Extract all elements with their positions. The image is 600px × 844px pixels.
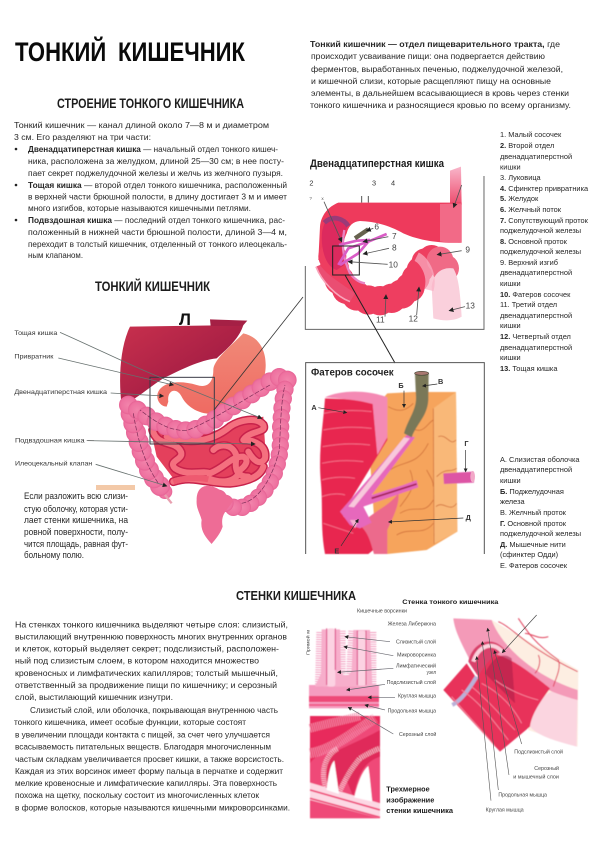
3D wall view: [310, 716, 380, 818]
labels right: Круглая мышца: [486, 807, 524, 813]
markers: 3: [372, 178, 376, 187]
legend: duodenum: 6. Желчный поток: [500, 205, 562, 214]
chart: digestive organs: [14, 319, 297, 544]
markers: 4: [391, 178, 395, 187]
text block: walls description: Слизистый слой, или оболочка, покрывающая внутреннюю часть: [30, 705, 278, 715]
text block: walls description: тонкого кишечника, имеет особые функции, которые состоят: [14, 717, 246, 727]
text block: intro: происходит усваивание пищи: она подвергается действию: [311, 51, 546, 61]
heading: walls: СТЕНКИ КИШЕЧНИКА: [236, 589, 356, 603]
text block: walls description: слой, выстилающий кишечник изнутри.: [15, 692, 173, 702]
organ: rectum: [197, 486, 233, 544]
legend: papilla of Vater: Е. Фатеров сосочек: [500, 561, 568, 570]
text block: structure description: положенный в нижней части брюшной полости, длиной 3—4 м,: [28, 227, 287, 237]
text block: structure description: Тощая кишка — второй отдел тонкого кишечника, расположенный: [28, 180, 287, 190]
organ: stomach outlet: [450, 167, 462, 205]
labels left: Продольная мышца: [388, 708, 436, 714]
text block: structure description: 3 см. Его разделяют на три части:: [14, 132, 151, 142]
markers: ?: [309, 196, 312, 201]
labels: Привратник: [14, 353, 53, 360]
callout numbers: 11: [376, 314, 385, 324]
text block: structure description: [14, 120, 287, 260]
legend: duodenum: поджелудочной железы: [500, 247, 581, 256]
callout: 3D label: [386, 786, 453, 815]
legend: papilla of Vater: (сфинктер Одди): [500, 550, 558, 559]
callout numbers: [374, 221, 475, 324]
legend: duodenum: поджелудочной железы: [500, 226, 581, 235]
letter marker: Л: [179, 310, 191, 329]
legend: duodenum: 1. Малый сосочек: [500, 130, 562, 139]
text block: intro: Тонкий кишечник — отдел пищеварительного тракта, где: [310, 39, 560, 49]
long pointer: inset to duodenum panel: [214, 297, 303, 410]
legend: duodenum: [500, 130, 589, 373]
organ: small intestine: [150, 417, 267, 483]
markers: [309, 178, 395, 201]
labels right: и мышечный слои: [513, 773, 559, 780]
text block: structure description: Тонкий кишечник — канал длиной около 7—8 м и диаметром: [14, 120, 269, 130]
legend: duodenum: 12. Четвертый отдел: [500, 332, 571, 341]
callout: mucosa area: больному полю.: [24, 550, 84, 560]
inset box: [333, 246, 359, 275]
text block: structure description: ным клапаном.: [28, 250, 83, 260]
text block: structure description: переходит в толстый кишечник, отделенный от тонкого илеоцекаль-: [28, 239, 287, 249]
heading: small intestine diagram: ТОНКИЙ КИШЕЧНИК: [95, 279, 211, 294]
line: inset to papilla panel: [345, 275, 395, 363]
labels left: Подслизистый слой: [387, 679, 436, 686]
organ: upper flexure and jejunum: [427, 247, 459, 282]
text block: walls description: ответственный за продвижение пищи по кишечнику; и серозный: [15, 680, 277, 690]
legend: duodenum: 7. Сопутствующий проток: [500, 216, 589, 225]
callout letters: Е: [334, 546, 339, 555]
labels right: [486, 748, 563, 813]
organ: large intestine, lobed tube: [119, 368, 297, 516]
callout: mucosa area: [24, 491, 128, 560]
legend: duodenum: 9. Верхний изгиб: [500, 258, 558, 267]
text block: intro: и кишечной слизи, которые расщепляют пищу на основные: [311, 76, 551, 86]
labels left: Круглая мышца: [398, 694, 436, 700]
labels: Двенадцатиперстная кишка: [14, 389, 107, 396]
organ: appendix: [165, 495, 172, 503]
text block: walls description: всасываемость питательных веществ. Благодаря многочисленным: [15, 742, 271, 752]
detail: duodenum shading: [316, 203, 462, 302]
text block: walls description: На стенках тонкого кишечника выделяют четыре слоя: слизистый,: [15, 620, 288, 630]
labels right: Продольная мышца: [498, 792, 547, 798]
labels right: Подслизистый слой: [514, 748, 563, 755]
text block: walls description: похожа на щетку, поскольку состоит из многочисленных клеток: [15, 790, 259, 800]
legend: duodenum: кишки: [500, 321, 521, 330]
organ: liver top: [210, 319, 247, 326]
legend: papilla of Vater: А. Слизистая оболочка: [500, 455, 580, 464]
heading: duodenum: Двенадцатиперстная кишка: [310, 158, 445, 170]
3D cutaway: [443, 615, 578, 801]
text block: structure description: в верхней части брюшной полости, в длину достигает 3 м и имеет: [28, 192, 287, 202]
legend: duodenum: 4. Сфинктер привратника: [500, 184, 589, 193]
legend: duodenum: двенадцатиперстной: [500, 152, 572, 161]
pointers: [58, 332, 262, 486]
inset box: [150, 377, 214, 444]
legend: duodenum: кишки: [500, 279, 521, 288]
heading: Стенка тонкого кишечника: [402, 599, 499, 606]
callout: mucosa area: ровной поверхности, полу-: [24, 527, 128, 537]
text block: structure description: ника, расположена за желудком, длиной 25—30 см; в нее посту-: [28, 156, 284, 166]
callout: 3D label: изображение: [386, 797, 434, 805]
callout numbers: 9: [465, 244, 470, 254]
legend: papilla of Vater: Д. Мышечные нити: [500, 540, 566, 549]
decorative callout bar: [96, 485, 135, 490]
text block: walls description: мелкие кровеносные и лимфатические капилляры. Эта поверхность: [15, 778, 277, 788]
legend: papilla of Vater: железа: [500, 497, 525, 506]
labels left: Железа Либеркюна: [388, 621, 436, 627]
callout numbers: 6: [374, 221, 379, 231]
callout numbers: 8: [392, 243, 397, 253]
text block: intro: ферментов, выработанных печенью, поджелудочной железой,: [311, 64, 563, 74]
panel: duodenum diagram: [305, 167, 484, 329]
legend: duodenum: двенадцатиперстной: [500, 343, 572, 352]
legend: duodenum: кишки: [500, 162, 521, 172]
legend: duodenum: 2. Второй отдел: [500, 141, 554, 150]
callout: mucosa area: Если разложить всю слизи-: [24, 491, 128, 501]
text block: structure description: много изгибов, которые называются кишечными петлями.: [28, 203, 251, 213]
legend: papilla of Vater: [500, 455, 581, 570]
legend: papilla of Vater: Г. Основной проток: [500, 519, 567, 528]
labels right: Серозный: [534, 765, 559, 772]
legend: papilla of Vater: В. Желчный проток: [500, 508, 567, 517]
callout: 3D label: Трехмерное: [386, 786, 430, 793]
labels: Тощая кишка: [14, 330, 58, 337]
rotated label: Прямой м: [305, 629, 312, 655]
organ: stomach: [157, 333, 266, 414]
heading: structure: СТРОЕНИЕ ТОНКОГО КИШЕЧНИКА: [57, 96, 244, 111]
text block: walls description: в форме волосков, которые называются кишечными микроворсинками.: [15, 803, 290, 813]
legend: duodenum: двенадцатиперстной: [500, 268, 572, 277]
callout numbers: 12: [409, 313, 418, 323]
labels: Илеоцекальный клапан: [15, 460, 93, 468]
callout letters: [311, 377, 472, 555]
labels: Подвздошная кишка —: [15, 437, 94, 444]
legend: papilla of Vater: двенадцатиперстной: [500, 465, 572, 474]
labels left: [357, 609, 436, 738]
legend: papilla of Vater: кишки: [500, 476, 521, 485]
anatomy: [320, 373, 474, 554]
callout letters: Д: [466, 513, 472, 522]
labels left: Серозный слой: [399, 731, 436, 738]
text block: intro: тонкого кишечника и разносящиеся кровью по всему организму.: [310, 100, 571, 110]
text block: structure description: Двенадцатиперстная кишка — начальный отдел тонкого кишеч-: [28, 144, 278, 154]
callout letters: В: [438, 377, 443, 386]
labels: [14, 330, 107, 468]
callout: mucosa area: лает стенки кишечника, на: [24, 515, 128, 525]
frame: [306, 363, 484, 554]
text block: structure description: Подвздошная кишка — последний отдел тонкого кишечника, рас-: [28, 215, 285, 225]
legend: duodenum: 11. Третий отдел: [500, 300, 557, 309]
text block: walls description: и клеток, который выделяет секрет; подслизистый, расположен-: [15, 644, 279, 654]
callouts: [324, 185, 465, 317]
labels left: Кишечные ворсинки: [357, 609, 407, 615]
text block: walls description: в увеличении площади контакта с пищей, за счет чего улучшается: [15, 730, 270, 740]
organ: duodenum lower loop: [318, 243, 445, 315]
legend: duodenum: 10. Фатеров сосочек: [500, 290, 571, 299]
callout: mucosa area: чится площадь, равная фут-: [24, 539, 128, 549]
organ: terminal ileum: [173, 478, 208, 482]
callout numbers: 13: [466, 300, 475, 310]
labels left: Слизистый слой: [396, 638, 436, 645]
callout numbers: 10: [389, 260, 398, 270]
legend: duodenum: 3. Луковица: [500, 173, 542, 182]
text block: walls description: Каждая из этих ворсинок имеет форму пальца в перчатке и содержит: [15, 766, 283, 776]
callout numbers: 7: [392, 231, 397, 241]
text block: walls description: [14, 620, 290, 813]
frame: [305, 176, 484, 329]
callout: mucosa area: стую оболочку, которая усти-: [24, 504, 128, 514]
text block: intro: [310, 39, 571, 110]
text block: walls description: кровеносных и лимфатических капилляров; толстый мышечный,: [15, 668, 278, 678]
organ: duodenum upper part: [318, 203, 462, 260]
chart: intestinal wall: [305, 599, 578, 818]
text block: walls description: ный под слизистым слоем, в котором находится множество: [15, 656, 259, 666]
callout letters: А: [311, 403, 317, 412]
panel: papilla of Vater: [306, 363, 484, 555]
organ: jejunum pale end: [432, 268, 462, 320]
detail: taenia: [133, 385, 285, 503]
title: ТОНКИЙ КИШЕЧНИК: [15, 36, 245, 67]
organ: liver: [120, 325, 243, 405]
callout letters: Б: [398, 381, 404, 390]
villi section: [309, 628, 379, 708]
legend: papilla of Vater: поджелудочной железы: [500, 529, 581, 538]
legend: duodenum: 13. Тощая кишка: [500, 364, 558, 373]
legend: duodenum: 8. Основной проток: [500, 237, 568, 246]
text block: structure description: пает секрет поджелудочной железы и желчь из желчного пузыря.: [28, 168, 283, 178]
callout: 3D label: стенки кишечника: [386, 808, 453, 815]
legend: duodenum: 5. Желудок: [500, 194, 539, 203]
text block: walls description: выстилающий внутреннюю поверхность многих внутренних органов: [15, 632, 287, 642]
text block: walls description: частым складкам увеличивается просвет кишки, а также ворсистость.: [15, 754, 284, 764]
markers: x: [321, 196, 324, 201]
text block: intro: элементы, в дальнейшем всасывающиеся в кровь через стенки: [311, 88, 569, 98]
legend: papilla of Vater: Б. Поджелудочная: [500, 487, 564, 496]
callout leaders: [318, 384, 466, 546]
markers: 2: [309, 178, 313, 187]
heading: Фатеров сосочек: [311, 367, 394, 378]
legend: duodenum: двенадцатиперстной: [500, 311, 572, 320]
leaders left: [338, 637, 395, 734]
callout letters: Г: [464, 439, 469, 448]
labels left: Микроворсинка: [397, 652, 436, 658]
labels left: узел: [427, 670, 436, 676]
labels left: Лимфатический: [396, 662, 436, 669]
legend: duodenum: кишки: [500, 353, 521, 362]
